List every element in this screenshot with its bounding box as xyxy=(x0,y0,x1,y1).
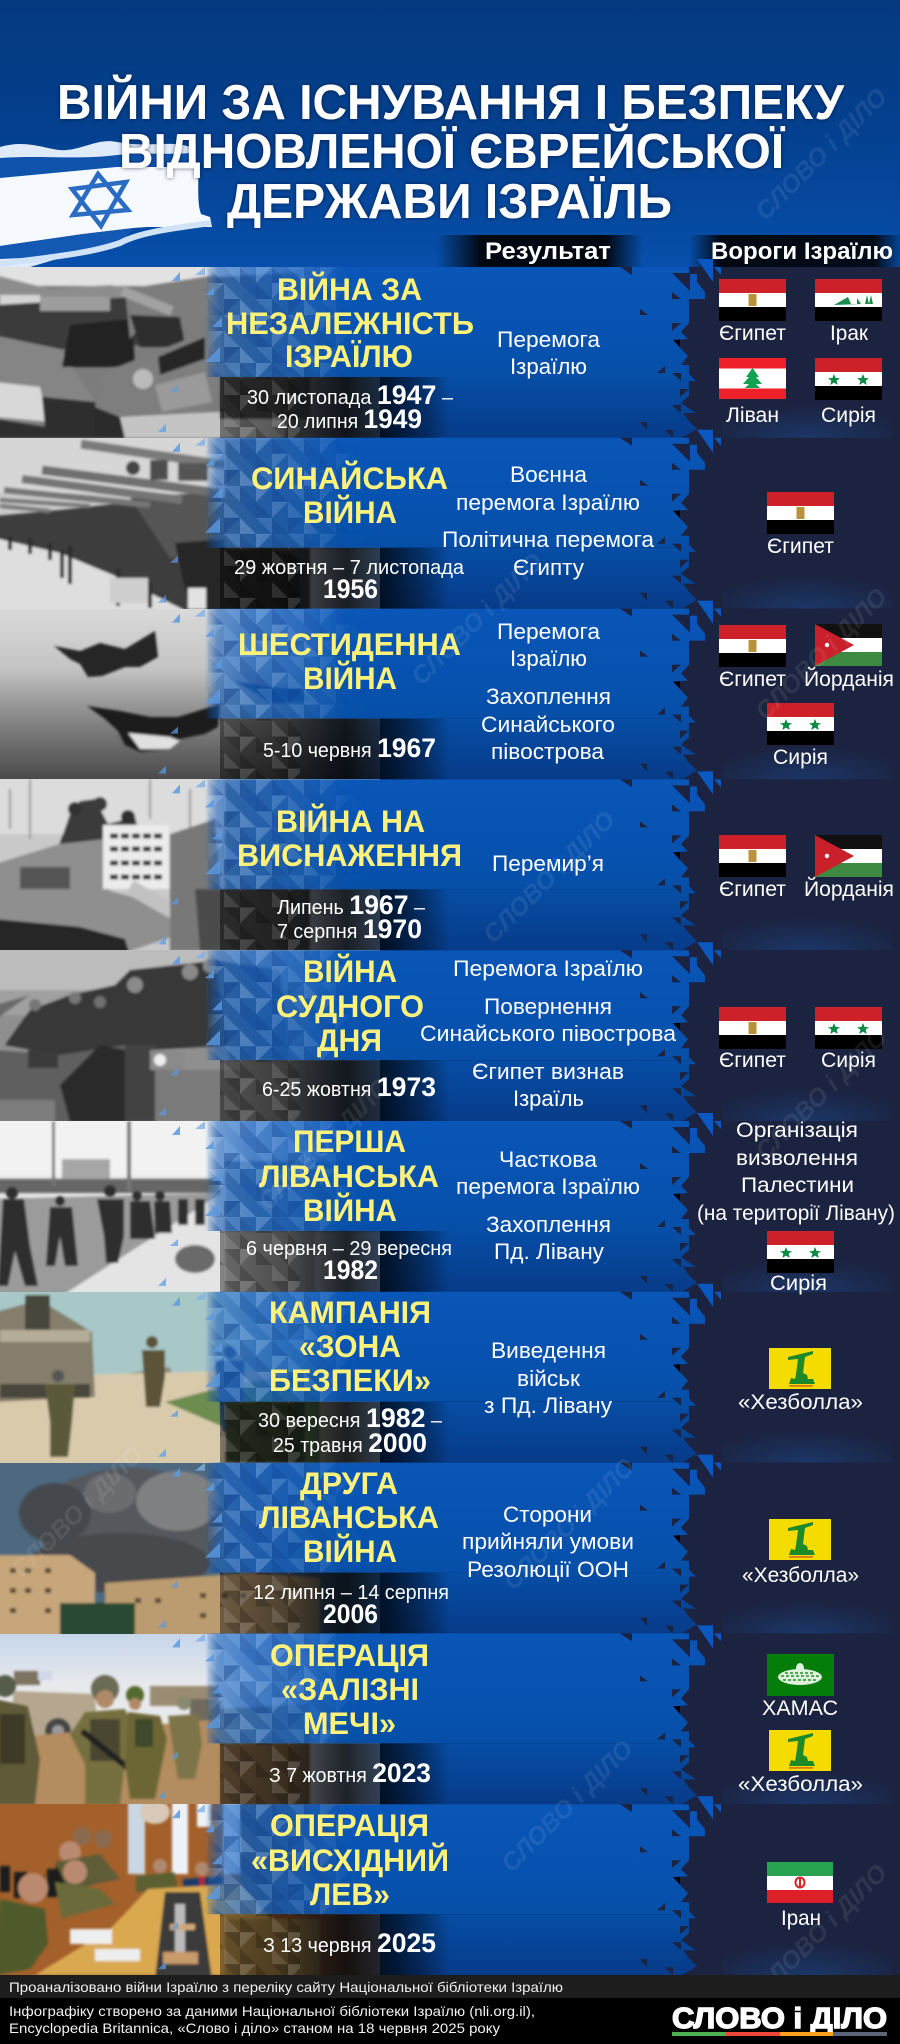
war name xyxy=(259,1465,439,1569)
war name: НЕЗАЛЕЖНІСТЬ xyxy=(226,305,474,341)
enemies: Єгипет xyxy=(719,1049,786,1072)
enemies: first lebanon war (drawn above the next row): Палестини xyxy=(741,1174,854,1197)
dates: 5-10 червня 1967 xyxy=(263,733,436,763)
war name xyxy=(276,953,424,1058)
enemies: first lebanon war (drawn above the next row): Сирія xyxy=(770,1272,827,1295)
photo: marching soldiers xyxy=(0,1121,380,1292)
photo: smoke over city xyxy=(0,1463,380,1634)
enemies xyxy=(767,492,834,558)
war name: ВІЙНА xyxy=(303,1533,397,1569)
photo: tank with sign xyxy=(0,779,380,950)
title xyxy=(57,75,844,229)
result: Пд. Лівану xyxy=(494,1239,605,1264)
row overlay xyxy=(158,1284,900,1463)
war name xyxy=(237,803,462,873)
logo: СЛОВО і ДІЛО xyxy=(672,2003,887,2035)
result: півострова xyxy=(491,739,604,764)
panel: first lebanon war xyxy=(0,1113,900,1297)
heading: enemies column: Вороги Ізраїлю xyxy=(711,238,893,265)
watermarks: СЛОВО і ДІЛО xyxy=(406,548,549,691)
watermarks: СЛОВО і ДІЛО xyxy=(498,1453,641,1596)
result xyxy=(442,462,654,580)
photo: soldiers on armoured vehicle xyxy=(0,950,380,1121)
result: Єгипет визнав xyxy=(472,1059,624,1084)
title: ДЕРЖАВИ ІЗРАЇЛЬ xyxy=(227,175,672,229)
dates: 6 червня – 29 вересня xyxy=(246,1238,452,1260)
watermarks: СЛОВО і ДІЛО xyxy=(750,83,893,226)
dates: 30 листопада 1947 – xyxy=(247,380,454,410)
panel: iron swords operation xyxy=(0,1625,900,1809)
war name: СИНАЙСЬКА xyxy=(251,460,448,496)
footer: sources: Інфографіку створено за даними Національної бібліотеки Ізраїлю (nli.org.il), xyxy=(9,2003,535,2019)
dates: З 7 жовтня 2023 xyxy=(269,1758,431,1788)
dates: 1956 xyxy=(323,574,378,604)
row overlay xyxy=(158,430,900,609)
war name: ВІЙНА xyxy=(303,953,397,989)
photo: artillery line xyxy=(0,438,380,609)
war name xyxy=(226,271,474,374)
result xyxy=(481,619,615,764)
panel: security zone campaign xyxy=(0,1284,900,1467)
result: Синайського півострова xyxy=(420,1021,676,1046)
row overlay xyxy=(158,601,900,780)
enemies: Ірак xyxy=(830,322,869,345)
result: Захоплення xyxy=(486,1212,611,1237)
dates xyxy=(253,1582,449,1629)
war name xyxy=(269,1294,431,1398)
war name: ВИСНАЖЕННЯ xyxy=(237,837,462,873)
photo: fighter jets xyxy=(0,609,380,779)
watermarks: СЛОВО і ДІЛО xyxy=(750,583,893,726)
war name: ВІЙНА НА xyxy=(276,803,425,839)
dates xyxy=(234,557,465,604)
result: Воєнна xyxy=(510,462,587,487)
result: Виведення xyxy=(491,1338,606,1363)
war name: ЛЕВ» xyxy=(310,1876,390,1912)
result xyxy=(456,1147,640,1264)
enemies: Йорданія xyxy=(804,667,894,691)
dates: 12 липня – 14 серпня xyxy=(253,1582,449,1604)
result: Перемир’я xyxy=(492,851,604,876)
watermarks: СЛОВО і ДІЛО xyxy=(750,1023,893,1166)
result: військ xyxy=(517,1366,580,1391)
war name: СУДНОГО xyxy=(276,988,424,1024)
war name: ВІЙНА ЗА xyxy=(277,271,422,307)
result: прийняли умови xyxy=(462,1529,634,1554)
result: Резолюції ООН xyxy=(467,1557,629,1582)
enemies xyxy=(719,279,882,427)
result: Ізраїлю xyxy=(510,646,587,671)
footer: analysis note: Проаналізовано війни Ізраїлю з переліку сайту Національної бібліотеки Ізраїлю xyxy=(9,1979,563,1995)
row overlay xyxy=(158,259,900,438)
row overlay xyxy=(158,1796,900,1975)
enemies: first lebanon war (drawn above the next row): визволення xyxy=(736,1147,858,1170)
war name xyxy=(238,626,461,696)
watermarks: СЛОВО і ДІЛО xyxy=(496,1735,639,1878)
footer: analysis note xyxy=(0,1975,900,1998)
dates xyxy=(247,380,454,434)
result xyxy=(484,1338,613,1418)
heading: result column xyxy=(436,235,643,267)
result: Політична перемога xyxy=(442,527,654,552)
result: Ізраїль xyxy=(513,1086,584,1111)
watermarks: СЛОВО і ДІЛО xyxy=(6,1441,149,1584)
result: Ізраїлю xyxy=(510,354,587,379)
dates: 25 травня 2000 xyxy=(273,1428,427,1458)
dates: З 13 червня 2025 xyxy=(263,1928,436,1958)
photo: soldiers in field xyxy=(0,1634,380,1804)
enemies: Сирія xyxy=(821,404,876,427)
result: Перемога xyxy=(497,327,600,352)
war name: «ЗОНА xyxy=(299,1328,401,1364)
enemies: Ліван xyxy=(726,404,779,427)
war name: ШЕСТИДЕННА xyxy=(238,626,461,662)
watermarks: СЛОВО і ДІЛО xyxy=(750,1859,893,2002)
enemies: ХАМАС xyxy=(762,1697,838,1720)
war name: ДРУГА xyxy=(300,1465,398,1501)
panel: second lebanon war xyxy=(0,1455,900,1638)
footer: sources xyxy=(0,1998,900,2044)
heading: result column: Результат xyxy=(485,238,611,265)
war name: ВІЙНА xyxy=(303,494,397,530)
war name: ОПЕРАЦІЯ xyxy=(270,1807,429,1843)
photo: wrecked tank xyxy=(0,267,380,438)
enemies: Єгипет xyxy=(719,322,786,345)
dates xyxy=(277,890,426,944)
watermarks: СЛОВО і ДІЛО xyxy=(478,806,621,949)
dates: 20 липня 1949 xyxy=(277,404,422,434)
war name: БЕЗПЕКИ» xyxy=(269,1362,431,1398)
war name xyxy=(259,1123,439,1228)
dates: Липень 1967 – xyxy=(277,890,426,920)
result: Перемога Ізраїлю xyxy=(453,956,643,981)
war name: ОПЕРАЦІЯ xyxy=(270,1637,429,1673)
enemies: «Хезболла» xyxy=(742,1564,859,1587)
enemies: «Хезболла» xyxy=(738,1391,863,1414)
war name: ПЕРША xyxy=(293,1123,406,1159)
panel: six-day war xyxy=(0,601,900,780)
enemies: Єгипет xyxy=(767,535,834,558)
enemies xyxy=(719,624,894,769)
panel: war of attrition xyxy=(0,771,900,955)
dates xyxy=(246,1238,452,1285)
war name xyxy=(251,1807,449,1912)
result: перемога Ізраїлю xyxy=(456,1174,640,1199)
result: перемога Ізраїлю xyxy=(456,490,640,515)
war name: «ЗАЛІЗНІ xyxy=(281,1671,419,1707)
photo: patrol on road xyxy=(0,1292,380,1463)
enemies xyxy=(738,1654,863,1796)
war name: ВІЙНА xyxy=(303,660,397,696)
enemies: Йорданія xyxy=(804,877,894,901)
watermarks: СЛОВО і ДІЛО xyxy=(253,1073,396,1216)
row overlay xyxy=(158,1455,900,1634)
enemies xyxy=(767,1862,833,1930)
war name: «ВИСХІДНИЙ xyxy=(251,1842,449,1878)
enemies: «Хезболла» xyxy=(738,1773,863,1796)
enemies: first lebanon war (drawn above the next row): Організація xyxy=(736,1119,858,1142)
row overlay xyxy=(158,771,900,950)
war name: ДНЯ xyxy=(317,1022,382,1058)
icon: israeli flag xyxy=(0,141,212,267)
result: з Пд. Лівану xyxy=(484,1393,613,1418)
row overlay xyxy=(158,1625,900,1804)
dates: 2006 xyxy=(323,1599,378,1629)
row overlay xyxy=(158,942,900,1121)
result xyxy=(497,327,600,379)
dates: 1982 xyxy=(323,1255,378,1285)
war name: МЕЧІ» xyxy=(303,1705,396,1741)
war name: ЛІВАНСЬКА xyxy=(259,1499,439,1535)
enemies xyxy=(719,835,894,901)
enemies: Іран xyxy=(781,1907,821,1930)
dates xyxy=(258,1403,443,1458)
enemies: Сирія xyxy=(773,746,828,769)
dates: 29 жовтня – 7 листопада xyxy=(234,557,465,579)
result xyxy=(420,956,676,1111)
war name: ІЗРАЇЛЮ xyxy=(285,338,413,374)
dates: 30 вересня 1982 – xyxy=(258,1403,443,1433)
war name: ВІЙНА xyxy=(303,1192,397,1228)
enemies: Сирія xyxy=(821,1049,876,1072)
enemies: Єгипет xyxy=(719,668,786,691)
enemies: first lebanon war (drawn above the next row) xyxy=(697,1119,895,1295)
photo: command meeting xyxy=(0,1804,380,1975)
dates: 7 серпня 1970 xyxy=(277,914,422,944)
result: Сторони xyxy=(503,1502,592,1527)
panel: rising lion operation xyxy=(0,1796,900,1979)
result: Синайського xyxy=(481,712,615,737)
war name: КАМПАНІЯ xyxy=(269,1294,431,1330)
enemies: first lebanon war (drawn above the next row): (на території Лівану) xyxy=(697,1202,895,1225)
panel: war of independence xyxy=(0,259,900,438)
row overlay xyxy=(158,1113,900,1292)
enemies xyxy=(719,1007,882,1072)
dates: 6-25 жовтня 1973 xyxy=(262,1072,436,1102)
result: Часткова xyxy=(499,1147,597,1172)
result: Повернення xyxy=(484,994,612,1019)
panel: sinai war xyxy=(0,430,900,613)
enemies xyxy=(738,1348,863,1414)
result: Перемога xyxy=(497,619,600,644)
result: Єгипту xyxy=(513,555,585,580)
war name xyxy=(251,460,448,530)
result: Захоплення xyxy=(486,684,611,709)
title: ВІДНОВЛЕНОЇ ЄВРЕЙСЬКОЇ xyxy=(119,124,785,179)
war name: ЛІВАНСЬКА xyxy=(259,1158,439,1194)
enemies xyxy=(742,1519,859,1587)
war name xyxy=(270,1637,429,1741)
panel: yom kippur war xyxy=(0,942,900,1126)
enemies: Єгипет xyxy=(719,878,786,901)
background xyxy=(0,0,900,267)
result xyxy=(462,1502,634,1582)
footer: sources: Encyclopedia Britannica, «Слово і діло» станом на 18 червня 2025 року xyxy=(9,2020,500,2036)
title: ВІЙНИ ЗА ІСНУВАННЯ І БЕЗПЕКУ xyxy=(57,75,844,130)
